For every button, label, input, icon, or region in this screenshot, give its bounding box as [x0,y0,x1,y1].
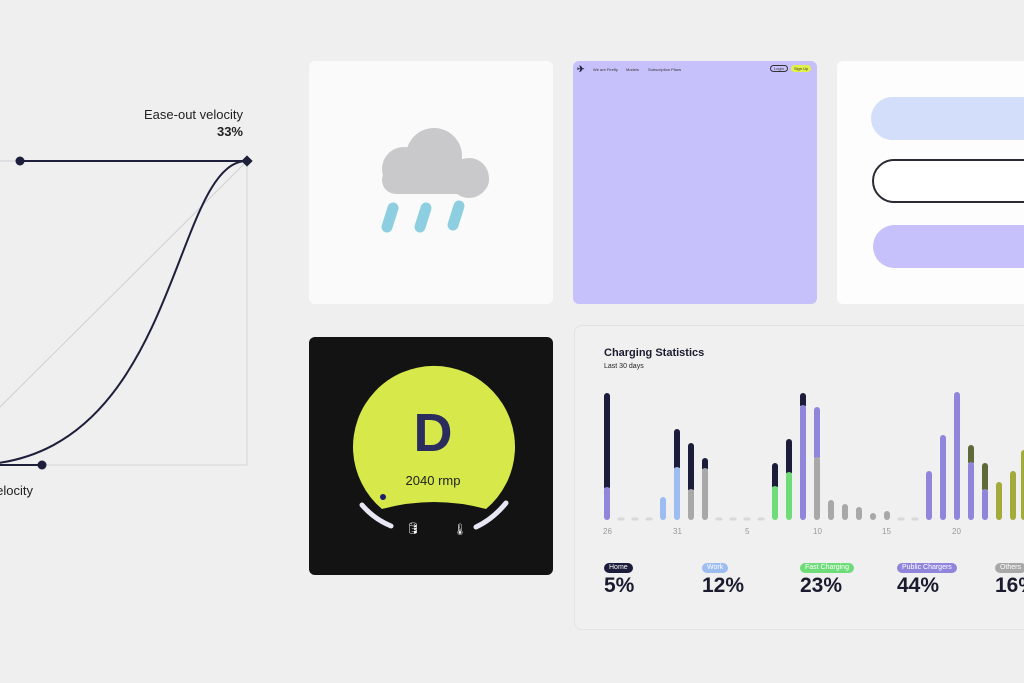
text: 31 [673,527,682,536]
legend: fast charging [800,563,854,597]
panel: gauge: 2040 rmp [406,473,460,488]
nav bar [577,64,811,74]
text: Fast Charging [805,564,849,571]
heading: charging statistics: Charging Statistics [604,347,704,359]
label: ease-out velocity [144,107,243,139]
legend: others [995,563,1024,597]
icon: rain cloud [382,128,489,232]
nav bar: We are Firefly [593,67,618,72]
label: ease-out velocity: Ease-out velocity [144,107,243,122]
axis labels [603,527,961,536]
legend: home [604,563,634,597]
legend: others: Others [1000,564,1021,571]
text: 10 [813,527,822,536]
text: 20 [952,527,961,536]
legend: public chargers [897,563,957,597]
panel: gauge: 🛢 [406,522,420,535]
text: 12% [702,574,744,597]
text: 5% [604,574,634,597]
panel: buttons [837,61,1024,304]
subheading: Last 30 days [604,363,644,370]
legend: work [702,563,744,597]
text: 26 [603,527,612,536]
panel: gauge [309,337,553,575]
text: 5 [745,527,749,536]
panel: gauge: 🌡 [453,523,467,536]
text: Home [609,564,628,571]
nav bar: ✈ [577,64,585,74]
panel: charging statistics [574,325,1024,630]
nav bar: Subscription Plans [648,67,681,72]
panel: gauge: D [414,403,452,463]
chart: easing curve [0,156,253,470]
text: Work [707,564,723,571]
text: 44% [897,574,939,597]
text: 23% [800,574,842,597]
label: ease-out velocity: 33% [217,124,243,139]
nav bar: Login [774,66,784,71]
nav bar: Models [626,67,639,72]
text: 15 [882,527,891,536]
text: Public Chargers [902,564,952,571]
nav bar: Sign Up [794,66,808,71]
panel: website mockup [573,61,817,304]
panel: weather icon [309,61,553,304]
